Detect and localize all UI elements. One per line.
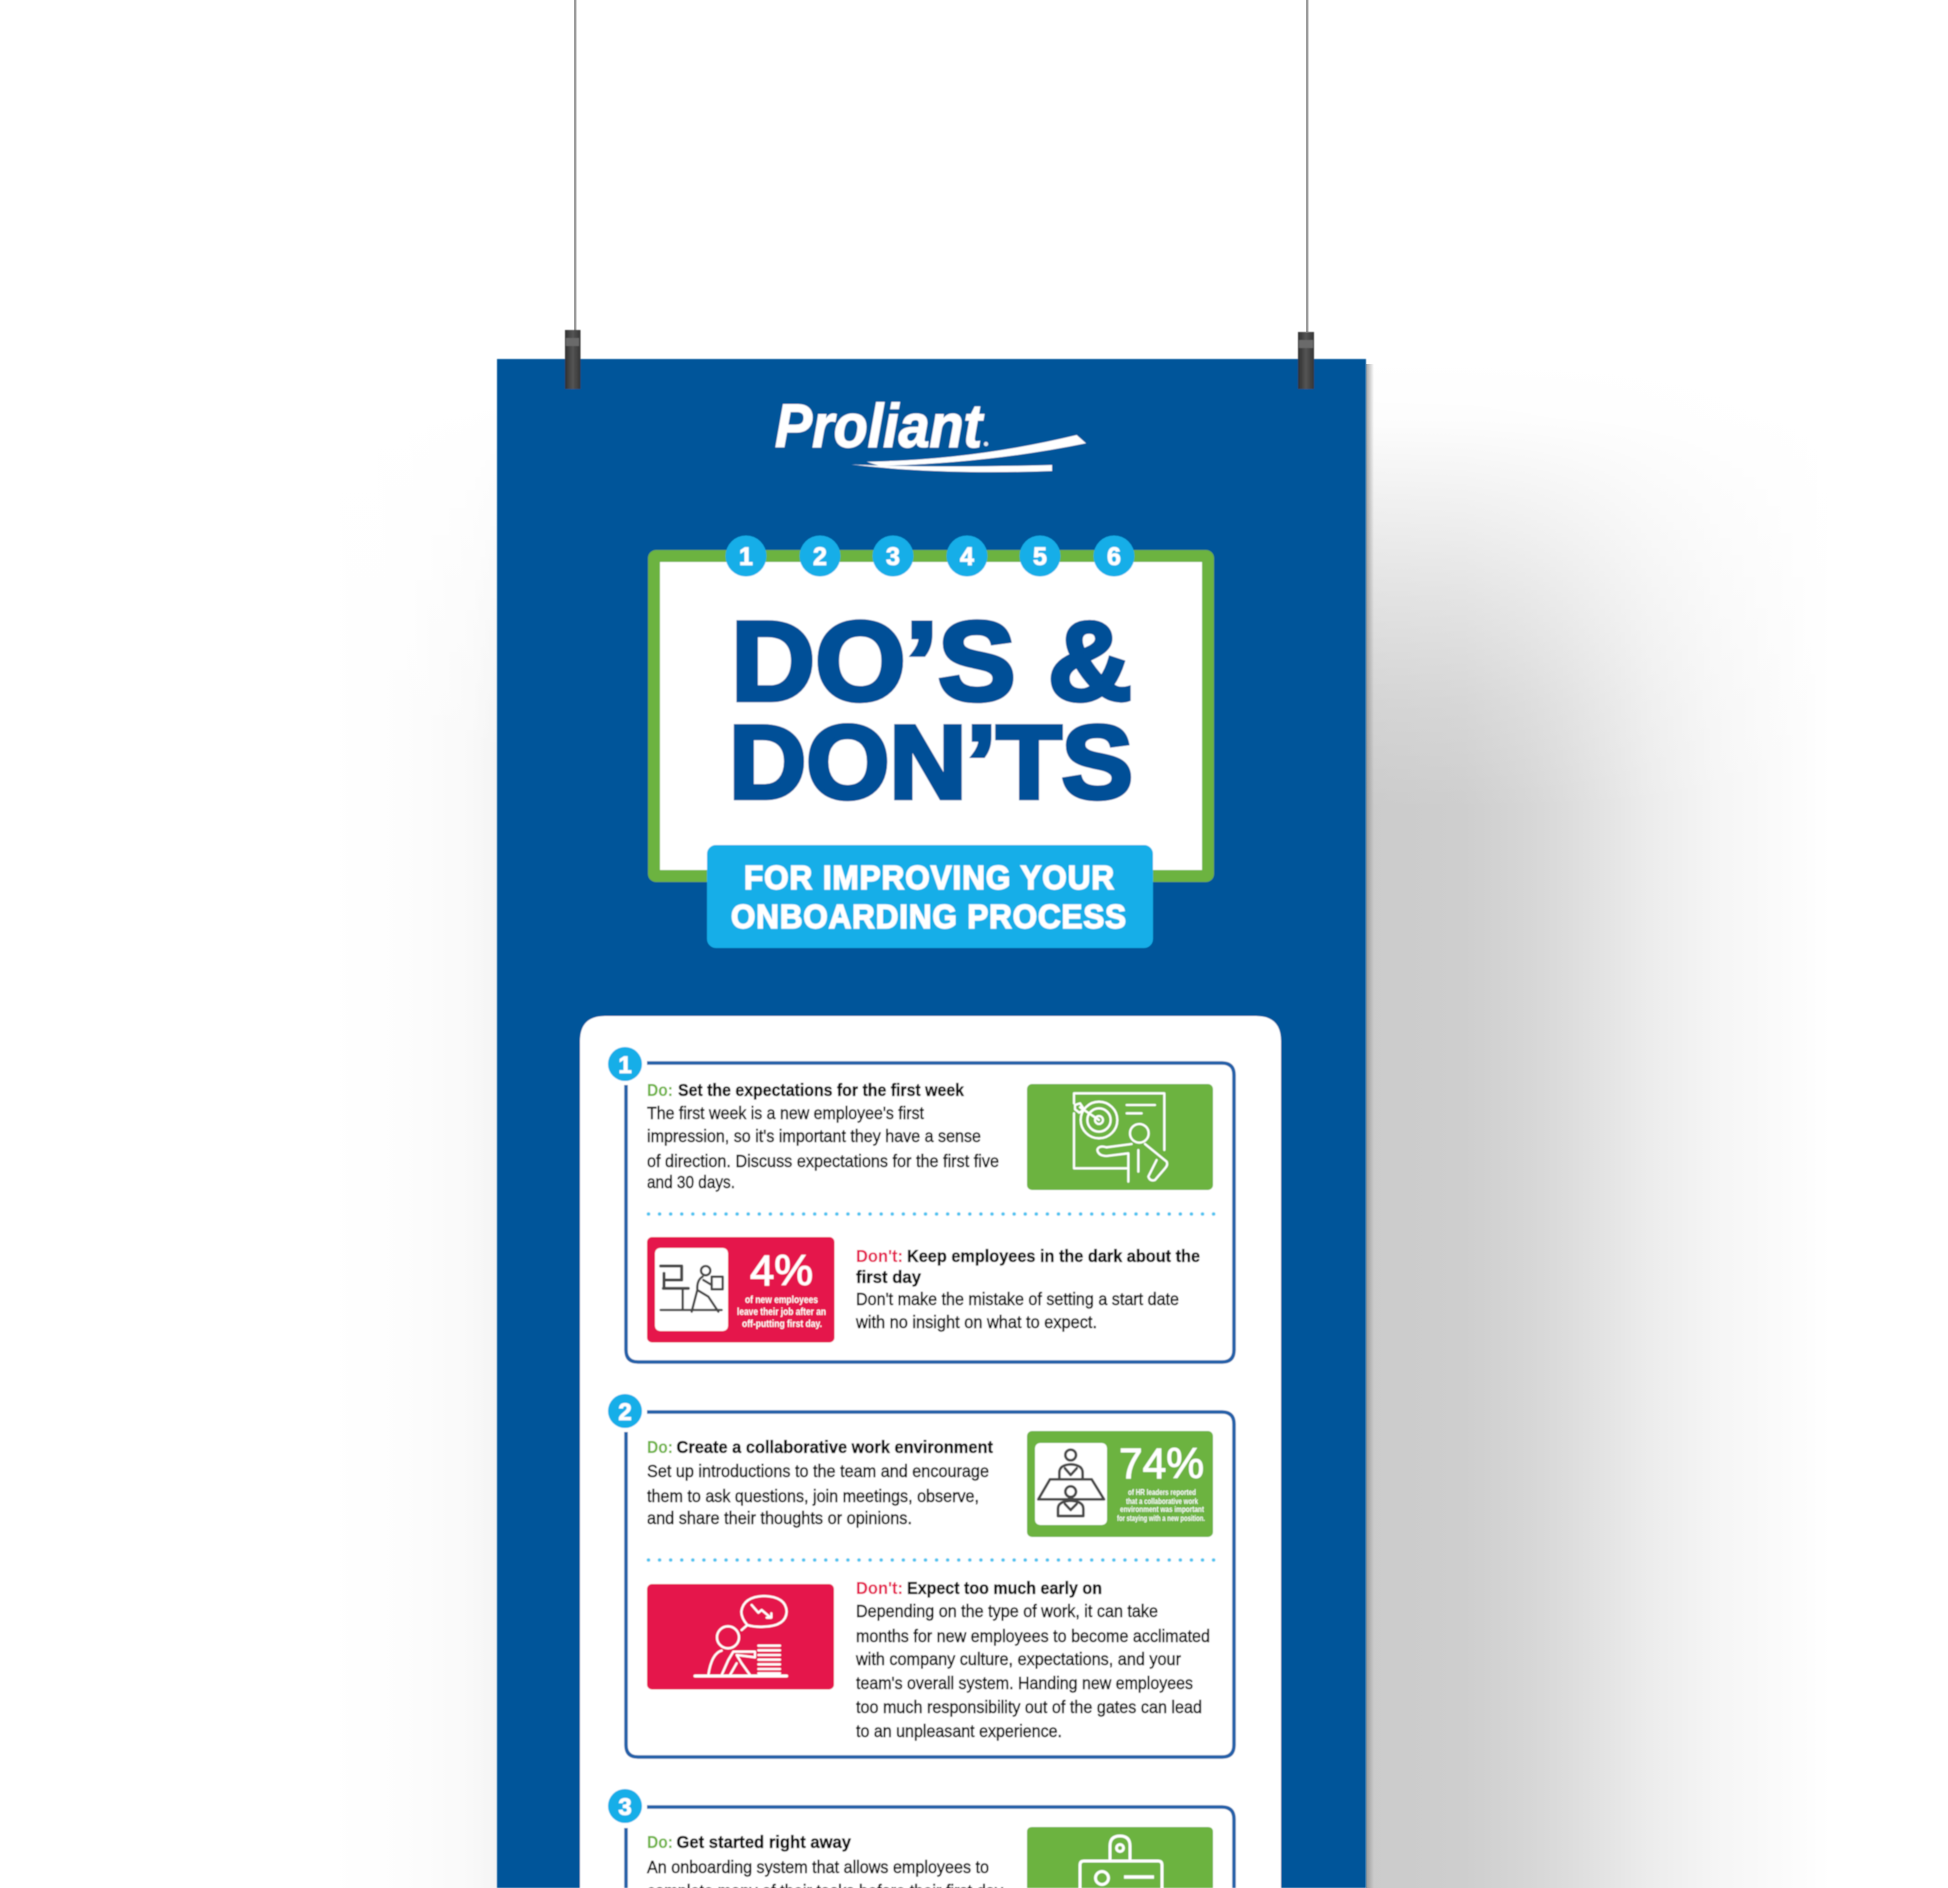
stat: 74%: 74% — [1119, 1440, 1204, 1488]
icon: person presenting target — [1027, 1084, 1213, 1190]
stat: 4% — [647, 1237, 834, 1342]
clip right — [1298, 332, 1314, 389]
step 1 don't text — [855, 1246, 1200, 1332]
step 2 do text — [647, 1437, 993, 1528]
step 2 don't text: Expect too much early on — [907, 1578, 1102, 1598]
logo: Proliant: Proliant — [775, 392, 984, 460]
step 2 don't text: Don't: — [856, 1578, 903, 1598]
step 1 don't text: Don't make the mistake of setting a start date — [856, 1289, 1179, 1309]
step 2 don't text: to an unpleasant experience. — [856, 1721, 1062, 1741]
step 1 outline — [626, 1063, 1234, 1362]
step 2 outline — [626, 1412, 1234, 1757]
stat: 74%: that a collaborative work — [1126, 1497, 1198, 1506]
poster edge shadow — [1366, 364, 1374, 1888]
step 2 do text: and share their thoughts or opinions. — [647, 1508, 912, 1528]
stat: 74%: environment was important — [1120, 1505, 1204, 1514]
step 3 badge — [608, 1789, 642, 1823]
title frame — [654, 536, 1208, 948]
numbered rings 1 to 6: 4 — [960, 543, 974, 571]
step 1 don't text: Don't: — [856, 1246, 903, 1266]
hanging wire left — [574, 0, 576, 332]
step 1 do text: Set the expectations for the first week — [678, 1080, 964, 1100]
step 1 do text: and 30 days. — [647, 1172, 735, 1192]
subtitle banner: FOR IMPROVING YOUR — [744, 859, 1115, 896]
step 2 don't text: team's overall system. Handing new employees — [856, 1673, 1193, 1693]
title: DO'S & DON'TS — [729, 599, 1133, 821]
numbered rings 1 to 6 — [726, 536, 1134, 576]
step 1 do text: The first week is a new employee's first — [647, 1103, 924, 1123]
icon: ID badge — [1027, 1827, 1213, 1888]
poster background — [497, 359, 1366, 1888]
numbered rings 1 to 6: 3 — [886, 543, 900, 571]
clip left — [565, 330, 580, 389]
stat: 4%: 4% — [750, 1247, 813, 1295]
subtitle banner: ONBOARDING PROCESS — [731, 898, 1127, 935]
stat: 74%: of HR leaders reported — [1128, 1488, 1196, 1497]
stat: 4%: of new employees — [745, 1295, 818, 1306]
step 2 do text: them to ask questions, join meetings, observe, — [647, 1486, 979, 1506]
title: DO'S & DON'TS: DON’TS — [729, 705, 1133, 821]
divider dots — [648, 1558, 1216, 1562]
numbered rings 1 to 6: 1 — [739, 543, 753, 571]
step 1 don't text: first day — [856, 1267, 921, 1287]
stat: 4%: leave their job after an — [737, 1307, 826, 1318]
step 2 badge — [608, 1394, 642, 1428]
panel: step 3 — [608, 1789, 1234, 1888]
stat: 74%: for staying with a new position. — [1117, 1514, 1205, 1523]
step 2 don't text — [855, 1578, 1210, 1741]
step 3 do text: An onboarding system that allows employees to — [647, 1857, 989, 1877]
step 2 don't text: too much responsibility out of the gates can lead — [856, 1697, 1202, 1717]
step 3 badge: 3 — [618, 1794, 632, 1821]
title: DO'S & DON'TS: DO’S & — [731, 599, 1132, 724]
stat: 4%: off-putting first day. — [742, 1319, 822, 1330]
step 1 do text: of direction. Discuss expectations for the first five — [647, 1151, 999, 1171]
icon: overwhelmed employee — [647, 1584, 834, 1690]
panel: step 2 — [608, 1394, 1234, 1757]
step 1 do text — [647, 1080, 999, 1192]
white content panel — [580, 1016, 1281, 1888]
hanging wire right — [1306, 0, 1308, 332]
stat: 74% — [1027, 1431, 1213, 1537]
panel: step 1 — [608, 1047, 1234, 1362]
step 2 do text: Set up introductions to the team and encourage — [647, 1461, 989, 1481]
step 3 do text: Get started right away — [676, 1832, 851, 1852]
numbered rings 1 to 6: 5 — [1033, 543, 1047, 571]
logo: Proliant — [775, 392, 1086, 472]
numbered rings 1 to 6: 2 — [813, 543, 827, 571]
cast shadow right of poster — [1366, 360, 1830, 1888]
step 1 badge: 1 — [618, 1052, 632, 1079]
step 1 do text: impression, so it's important they have a sense — [647, 1126, 981, 1146]
step 3 outline — [626, 1807, 1234, 1888]
faint shadow left of poster — [330, 400, 497, 1888]
step 2 do text: Do: — [647, 1437, 673, 1457]
numbered rings 1 to 6: 6 — [1107, 543, 1121, 571]
step 2 don't text: Depending on the type of work, it can take — [856, 1601, 1158, 1621]
step 1 don't text: with no insight on what to expect. — [855, 1312, 1097, 1332]
step 2 badge: 2 — [618, 1399, 632, 1426]
step 3 do text — [647, 1832, 1003, 1888]
step 3 do text: Do: — [647, 1832, 673, 1852]
subtitle banner — [707, 845, 1153, 948]
divider dots — [648, 1212, 1216, 1216]
step 1 badge — [608, 1047, 642, 1081]
step 1 do text: Do: — [647, 1080, 673, 1100]
step 1 don't text: Keep employees in the dark about the — [907, 1246, 1200, 1266]
step 2 don't text: with company culture, expectations, and your — [855, 1649, 1181, 1669]
step 2 don't text: months for new employees to become acclimated — [856, 1626, 1210, 1646]
step 2 do text: Create a collaborative work environment — [676, 1437, 993, 1457]
